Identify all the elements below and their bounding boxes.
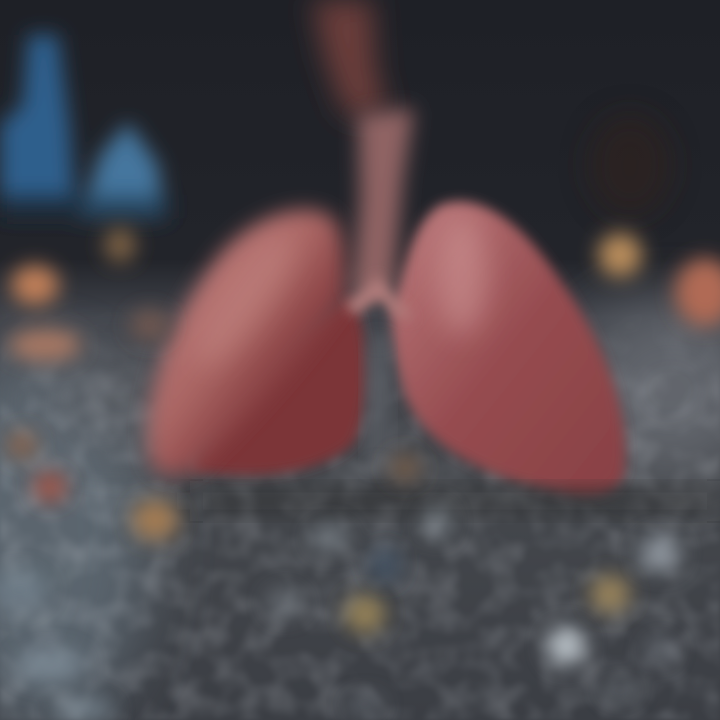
bokeh lights: warm — [7, 227, 720, 633]
bronchi — [345, 275, 415, 320]
gap between the lungs — [368, 340, 388, 465]
left lung — [148, 209, 346, 475]
trachea — [352, 108, 414, 300]
right lung highlight — [436, 215, 488, 335]
bokeh lights: cool — [0, 505, 681, 720]
left lung highlight — [179, 221, 311, 379]
icon: lungs — [148, 108, 625, 495]
shadow beneath lungs — [190, 490, 720, 512]
right lung — [392, 202, 625, 495]
icon: blue blurred shapes — [0, 35, 170, 218]
smoke above the trachea — [312, 0, 388, 115]
left dark under-lobe — [190, 295, 367, 475]
